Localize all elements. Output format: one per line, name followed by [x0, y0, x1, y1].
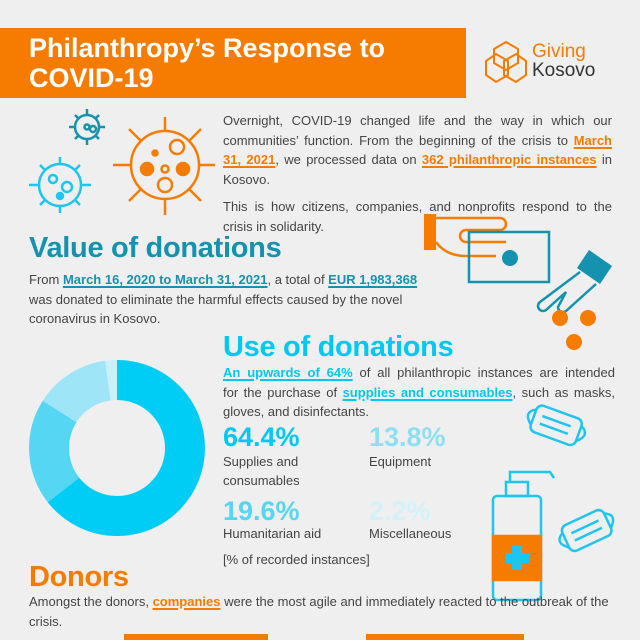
text: use: gloves, and disinfectants.: [223, 404, 369, 419]
text: use: [223, 365, 615, 419]
stats: 19.6%: [223, 496, 300, 526]
icon: viruses: [29, 109, 215, 215]
stats: consumables: [223, 473, 300, 488]
heading: use of donations: Use of donations: [223, 331, 453, 363]
title bar: COVID-19: [29, 63, 154, 93]
stats: 2.2%: [369, 496, 431, 526]
heading: donors: Donors: [29, 561, 129, 593]
icon: masks and sanitizer: [492, 404, 614, 602]
icon: hands with money: [424, 214, 612, 350]
stats: Supplies and: [223, 454, 298, 469]
stats: Equipment: [369, 454, 431, 469]
text: use: An upwards of 64% of all philanthropic instances are intended: [223, 365, 615, 380]
logo: Giving: [532, 41, 586, 62]
stats: Miscellaneous: [369, 526, 451, 541]
stats: 64.4%: [223, 422, 300, 452]
heading: value of donations: Value of donations: [29, 232, 281, 264]
text: value: From March 16, 2020 to March 31, 2021, a total of EUR 1,983,368 was donated to eliminate the harmful effects caused by the novel coronavirus in Kosovo.: [29, 272, 417, 326]
logo: Kosovo: [532, 60, 595, 81]
title bar: [0, 28, 466, 98]
stats: [% of recorded instances]: [223, 552, 370, 567]
intro text: [223, 113, 612, 234]
stats: Humanitarian aid: [223, 526, 321, 541]
text: use: for the purchase of supplies and consumables, such as masks,: [223, 384, 615, 400]
stats: 13.8%: [369, 422, 446, 452]
stats: [223, 422, 451, 567]
intro text: Overnight, COVID-19 changed life and the way in which our communities’ function. From the beginning of the crisis to March 31, 2021, we processed data on 362 philanthropic instances in Kosovo.: [223, 113, 612, 186]
intro text: This is how citizens, companies, and nonprofits respond to the crisis in solidarity.: [223, 199, 612, 234]
orange boxes: [124, 634, 268, 640]
logo: [485, 40, 595, 84]
title bar: Philanthropy’s Response to: [29, 33, 385, 63]
text: donors: Amongst the donors, companies were the most agile and immediately reacted to the outbreak of the crisis.: [29, 594, 609, 628]
donut chart: [29, 360, 205, 536]
